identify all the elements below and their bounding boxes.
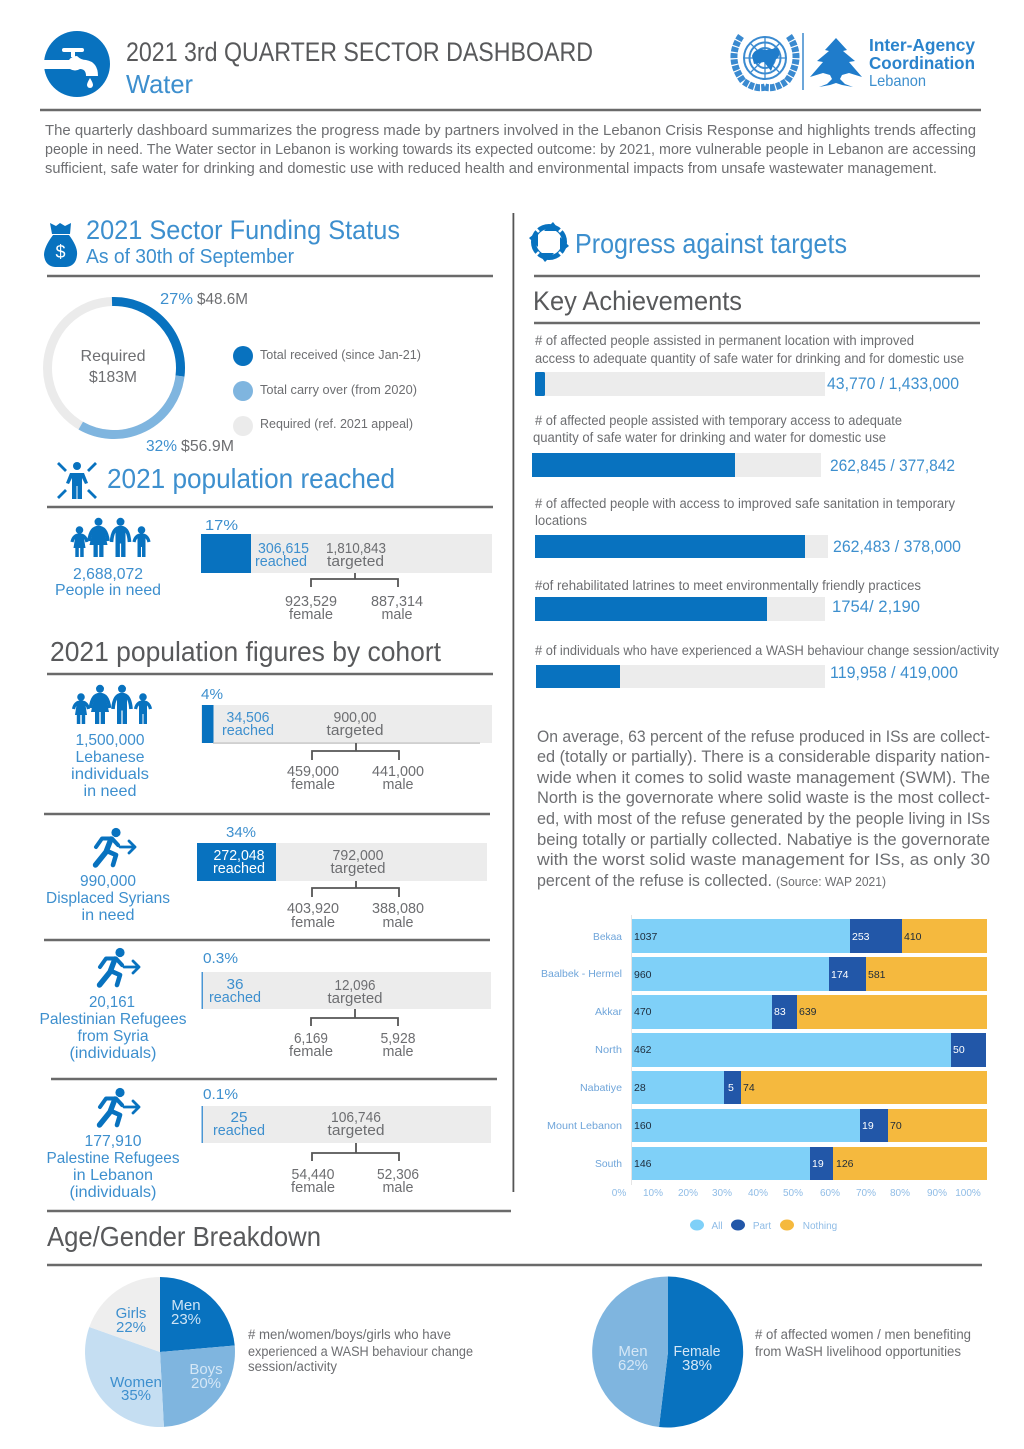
indicator: temporary access water	[532, 413, 955, 477]
indicator: permanent location water: access to adequate quantity of safe water for drinking and for domestic use	[535, 351, 964, 366]
indicator: temporary access water: # of affected people assisted with temporary access to adequate	[535, 413, 902, 428]
heading: key achievements: Key Achievements	[533, 286, 742, 316]
breakdown: 52,306	[377, 1166, 419, 1183]
logo text: Inter-Agency Coordination Lebanon: Lebanon	[869, 73, 926, 90]
intro text: sufficient, safe water for drinking and domestic use with reduced health and environmental impacts from unsafe wastewater management.	[45, 161, 937, 177]
row: North: 50	[953, 1044, 965, 1056]
caption: livelihood gender: # of affected women / men benefiting	[755, 1327, 971, 1342]
indicator: temporary access water: quantity of safe water for drinking and water for domestic use	[533, 430, 886, 445]
legend: funding: Required (ref. 2021 appeal)	[260, 416, 413, 431]
cohort label: Lebanese	[76, 749, 145, 766]
indicator: safe sanitation	[535, 496, 961, 558]
heading: progress against targets: Progress against targets	[575, 228, 847, 259]
label: carry over: 32%	[146, 438, 177, 455]
row: Baalbek - Hermel: Baalbek - Hermel	[541, 968, 622, 980]
cohort label: from Syria	[78, 1028, 149, 1045]
row: Baalbek - Hermel: 174	[831, 969, 849, 981]
logo divider	[802, 33, 804, 90]
text block: solid waste summary: ed (totally or partially). There is a considerable disparity nation-	[537, 747, 990, 766]
bar: reached	[213, 860, 265, 877]
row: Mount Lebanon: 70	[890, 1120, 902, 1132]
row: Bekaa: 1037	[634, 931, 658, 943]
caption: livelihood gender: from WaSH livelihood opportunities	[755, 1344, 961, 1359]
heading: funding status: As of 30th of September	[86, 246, 294, 268]
cohort label: in Lebanon	[73, 1167, 153, 1184]
chart: livelihood gender pie	[592, 1276, 743, 1427]
x axis labels: 100%	[955, 1188, 981, 1199]
chart: funding donut: Required	[80, 348, 146, 365]
bar: 25	[230, 1109, 248, 1126]
chart: age gender pie: 22%	[116, 1319, 146, 1336]
cohort label: 1,500,000	[76, 732, 145, 749]
chart: livelihood gender pie: 38%	[682, 1357, 712, 1374]
icon: family	[74, 685, 150, 724]
row: North: North	[595, 1044, 622, 1056]
indicator: temporary access water: 262,845 / 377,842	[830, 456, 955, 475]
chart: age gender pie: 23%	[171, 1311, 201, 1328]
breakdown: female	[291, 776, 335, 793]
chart: livelihood gender pie: Men	[618, 1343, 648, 1360]
breakdown: female and male: 923,529	[285, 593, 337, 610]
row: Akkar: 83	[774, 1006, 786, 1018]
row: Bekaa: 253	[852, 931, 870, 943]
x axis labels: 10%	[643, 1188, 663, 1199]
row: Baalbek - Hermel: 581	[868, 969, 886, 981]
heading: age/gender breakdown: Age/Gender Breakdown	[47, 1221, 321, 1252]
subtitle: Water: Water	[126, 69, 193, 99]
cohort label: Palestinian Refugees	[40, 1011, 186, 1028]
bar: 792,000	[332, 847, 384, 864]
x axis labels: 50%	[783, 1188, 803, 1199]
row: North	[595, 1033, 986, 1067]
cohort label: in need	[84, 783, 136, 800]
x axis labels: 70%	[856, 1188, 876, 1199]
bar	[202, 1086, 491, 1143]
chart: age gender pie: Boys	[189, 1361, 223, 1378]
text block: solid waste summary: being totally or partially collected. Nabatiye is the governorate	[537, 830, 990, 849]
bar: reached vs targeted: targeted	[327, 553, 384, 570]
legend: funding	[233, 346, 421, 436]
panel: Palestine Refugees in Lebanon cohort	[46, 1086, 491, 1201]
legend: funding: Total carry over (from 2020)	[260, 382, 417, 397]
row: Nabatiye	[580, 1071, 987, 1104]
people in need: 2,688,072	[73, 566, 143, 583]
bar: reached vs targeted: 306,615	[258, 540, 309, 557]
x axis labels: 80%	[890, 1188, 910, 1199]
caption: age gender: experienced a WASH behaviour change	[248, 1344, 473, 1359]
row: Bekaa	[593, 919, 987, 953]
cohort label: 990,000	[80, 873, 136, 890]
cohort label: Displaced Syrians	[46, 890, 170, 907]
logo text: Inter-Agency Coordination Lebanon: Inter-Agency	[869, 35, 975, 55]
cohort label: (individuals)	[70, 1045, 156, 1062]
breakdown: female and male: male	[382, 606, 412, 623]
caption: age gender	[248, 1327, 473, 1374]
indicator: safe sanitation: # of affected people with access to improved safe sanitation in temporary	[535, 496, 955, 511]
heading: funding status	[86, 215, 400, 268]
panel: Lebanese cohort	[71, 685, 492, 800]
chart legend	[690, 1220, 837, 1232]
row: Bekaa: Bekaa	[593, 931, 622, 943]
icon: runner	[100, 948, 139, 985]
x axis labels: 60%	[820, 1188, 840, 1199]
label: carry over	[146, 438, 234, 455]
x axis labels: 30%	[712, 1188, 732, 1199]
row: Nabatiye: Nabatiye	[580, 1082, 622, 1094]
people in need: People in need	[55, 582, 161, 599]
row: North: 462	[634, 1044, 652, 1056]
icon: progress cycle	[529, 222, 569, 262]
breakdown: female and male	[285, 573, 423, 623]
bar: reached	[213, 1122, 265, 1139]
breakdown: 388,080	[372, 900, 424, 917]
bar: reached vs targeted: 1,810,843	[326, 540, 386, 557]
caption: age gender: # men/women/boys/girls who have	[248, 1327, 451, 1342]
logo: cedar tree	[810, 38, 862, 87]
row: Akkar	[595, 995, 987, 1029]
indicator: rehabilitated latrines: 1754/ 2,190	[832, 597, 920, 616]
chart legend: Nothing	[803, 1221, 837, 1232]
caption: livelihood gender	[755, 1327, 971, 1359]
x axis labels: 40%	[748, 1188, 768, 1199]
heading: funding status: 2021 Sector Funding Status	[86, 215, 400, 245]
chart: funding donut: $183M	[89, 369, 137, 386]
breakdown	[287, 881, 424, 931]
label: received: 27%	[160, 291, 193, 308]
cohort label	[40, 994, 186, 1062]
row: Mount Lebanon	[547, 1109, 987, 1142]
row: South: 126	[836, 1158, 854, 1170]
label: carry over: $56.9M	[181, 438, 234, 455]
row: Nabatiye: 28	[634, 1082, 646, 1094]
breakdown	[287, 743, 424, 793]
icon: family	[72, 518, 149, 557]
indicator: permanent location water: # of affected people assisted in permanent location with improved	[535, 333, 914, 348]
icon: money bag	[44, 223, 77, 267]
breakdown: female	[289, 1043, 333, 1060]
icon: person reached	[58, 462, 96, 499]
bar: targeted	[330, 860, 386, 877]
bar: reached	[209, 989, 261, 1006]
row: Nabatiye: 74	[743, 1082, 755, 1094]
breakdown: male	[382, 776, 414, 793]
text block: solid waste summary: On average, 63 percent of the refuse produced in ISs are collect-	[537, 727, 990, 746]
row: South: 146	[634, 1158, 652, 1170]
row: Baalbek - Hermel	[541, 957, 987, 991]
indicator: WASH behaviour change	[535, 643, 999, 688]
row: Akkar: 639	[799, 1006, 817, 1018]
bar: reached vs targeted: reached	[255, 553, 307, 570]
intro text: people in need. The Water sector in Lebanon is working towards its expected outcome: by 2021, more vulnerable people in Lebanon are accessing	[45, 142, 976, 158]
breakdown: 459,000	[287, 763, 339, 780]
chart: funding donut	[48, 301, 180, 435]
icon: money bag: $	[55, 242, 66, 262]
text block: solid waste summary: ed, with most of the refuse generated by the people living in ISs	[537, 809, 990, 828]
caption: age gender: session/activity	[248, 1359, 337, 1374]
row: Baalbek - Hermel: 960	[634, 969, 652, 981]
title: 2021 3rd QUARTER SECTOR DASHBOARD	[126, 37, 593, 67]
chart: age gender pie: Women	[110, 1374, 162, 1391]
cohort label	[46, 873, 170, 924]
cohort label: in need	[82, 907, 134, 924]
indicator: safe sanitation: 262,483 / 378,000	[833, 537, 961, 556]
chart: livelihood gender pie: 62%	[618, 1357, 648, 1374]
heading: cohort figures: 2021 population figures by cohort	[50, 636, 441, 667]
logo text: Inter-Agency Coordination Lebanon: Coordination	[869, 53, 975, 73]
text block: solid waste summary: with the worst solid waste management for ISs, as only 30	[536, 850, 990, 869]
bar: 106,746	[331, 1109, 381, 1126]
chart: age gender pie: 20%	[191, 1375, 221, 1392]
row: South: 19	[812, 1158, 824, 1170]
row: South: South	[595, 1158, 622, 1170]
breakdown: male	[382, 1043, 414, 1060]
bar: 34,506	[226, 709, 270, 726]
bar	[202, 950, 491, 1009]
row: Bekaa: 410	[904, 931, 922, 943]
bar	[201, 686, 492, 744]
breakdown: female	[291, 1179, 335, 1196]
chart legend: All	[711, 1221, 723, 1232]
text block: solid waste summary: wide when it comes to solid waste management (SWM). The	[536, 768, 990, 787]
row: Nabatiye: 5	[728, 1082, 734, 1094]
panel: Palestinian Refugees from Syria cohort	[40, 948, 491, 1062]
indicator: WASH behaviour change: 119,958 / 419,000	[830, 663, 958, 682]
panel: total population reached	[55, 517, 492, 623]
text block: solid waste summary: percent of the refuse is collected.	[537, 871, 772, 890]
breakdown: 6,169	[294, 1030, 328, 1047]
bar: 4%	[201, 686, 223, 703]
icon: water tap	[41, 31, 110, 97]
breakdown: 54,440	[292, 1166, 334, 1183]
bar: 0.3%	[203, 950, 238, 967]
panel: Displaced Syrians cohort	[46, 824, 487, 931]
logo text: Inter-Agency Coordination Lebanon	[869, 35, 975, 90]
breakdown	[289, 1009, 416, 1060]
indicator: rehabilitated latrines: #of rehabilitated latrines to meet environmentally friendly practices	[535, 578, 921, 593]
cohort label: individuals	[71, 766, 149, 783]
label: received	[160, 291, 248, 308]
cohort label: 177,910	[84, 1133, 142, 1150]
intro text	[45, 123, 976, 177]
indicator: rehabilitated latrines	[535, 578, 921, 621]
breakdown: 441,000	[372, 763, 424, 780]
bar: 900,00	[334, 709, 376, 726]
breakdown: female and male: female	[289, 606, 333, 623]
x axis labels: 20%	[678, 1188, 698, 1199]
bar: reached vs targeted: 17%	[205, 517, 238, 534]
text block: solid waste summary: (Source: WAP 2021)	[776, 875, 886, 889]
chart: age gender pie: 35%	[121, 1387, 151, 1404]
bar: reached vs targeted	[201, 517, 492, 573]
breakdown: male	[382, 914, 414, 931]
row: South	[595, 1147, 987, 1180]
x axis labels: 90%	[927, 1188, 947, 1199]
legend: funding: Total received (since Jan-21)	[260, 347, 421, 362]
people in need	[55, 566, 161, 599]
chart: age gender pie: Girls	[116, 1305, 146, 1322]
bar	[197, 824, 487, 881]
row: Akkar: Akkar	[595, 1006, 623, 1018]
indicator: permanent location water: 43,770 / 1,433,000	[827, 374, 959, 393]
cohort label	[71, 732, 149, 800]
bar: 272,048	[214, 847, 264, 864]
chart: age gender pie	[85, 1277, 235, 1427]
bar: 34%	[226, 824, 256, 841]
heading: population reached: 2021 population reached	[107, 463, 395, 494]
label: received: $48.6M	[197, 291, 248, 308]
cohort label	[46, 1133, 180, 1201]
chart: solid waste collection by governorate	[541, 915, 987, 1232]
icon: runner	[100, 1088, 139, 1125]
bar: targeted	[326, 722, 384, 739]
column divider	[512, 213, 514, 1192]
cohort label: (individuals)	[70, 1184, 156, 1201]
indicator: WASH behaviour change: # of individuals who have experienced a WASH behaviour change session/activity	[535, 643, 999, 658]
breakdown: female and male: 887,314	[371, 593, 423, 610]
breakdown: 5,928	[380, 1030, 416, 1047]
bar: 0.1%	[203, 1086, 238, 1103]
chart legend: Part	[753, 1221, 771, 1232]
bar: 12,096	[334, 977, 376, 994]
text block: solid waste summary	[536, 727, 990, 890]
x axis labels: 0%	[612, 1188, 626, 1199]
cohort label: Palestine Refugees	[46, 1150, 180, 1167]
row: Akkar: 470	[634, 1006, 652, 1018]
breakdown	[291, 1143, 419, 1196]
logo: United Nations emblem	[734, 36, 796, 88]
x axis labels	[612, 1188, 981, 1199]
bar: reached	[222, 722, 274, 739]
row: Mount Lebanon: 160	[634, 1120, 652, 1132]
bar: targeted	[328, 990, 382, 1007]
row: Mount Lebanon: Mount Lebanon	[547, 1120, 622, 1132]
cohort label: 20,161	[89, 994, 135, 1011]
row: Mount Lebanon: 19	[862, 1120, 874, 1132]
indicator: permanent location water	[535, 333, 964, 396]
breakdown: male	[382, 1179, 414, 1196]
breakdown: 403,920	[287, 900, 339, 917]
bar: 36	[226, 976, 244, 993]
bar: targeted	[328, 1122, 384, 1139]
chart: livelihood gender pie: Female	[674, 1343, 720, 1360]
intro text: The quarterly dashboard summarizes the progress made by partners involved in the Lebanon Crisis Response and highlights trends affecting	[45, 123, 976, 139]
chart: age gender pie: Men	[171, 1297, 201, 1314]
text block: solid waste summary: North is the governorate where solid waste is the most collect-	[537, 788, 990, 807]
breakdown: female	[291, 914, 335, 931]
icon: runner	[96, 828, 135, 865]
indicator: safe sanitation: locations	[535, 513, 587, 528]
